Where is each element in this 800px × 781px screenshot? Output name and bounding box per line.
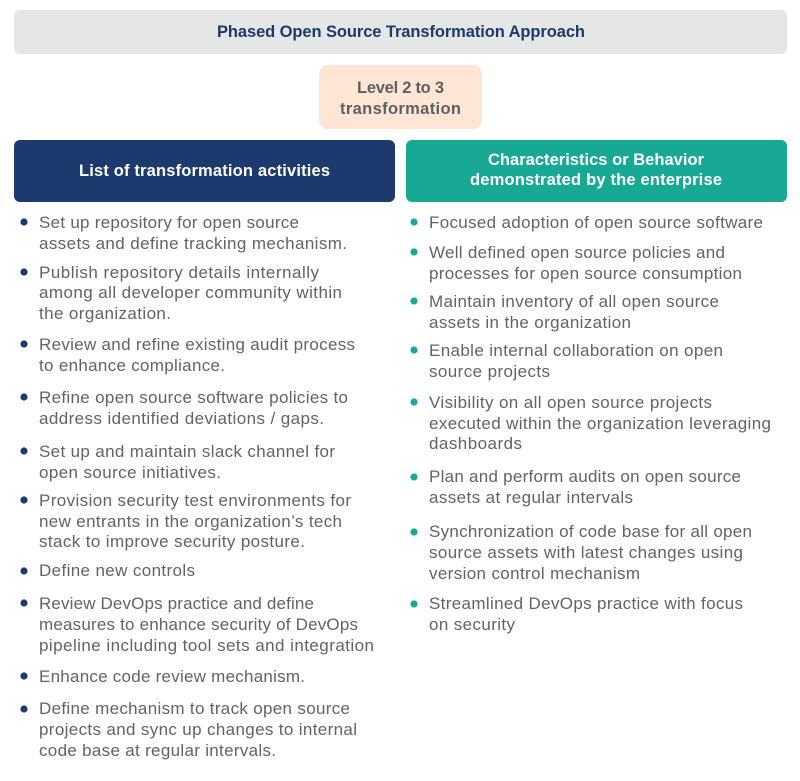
activity item 2: among all developer community within (39, 283, 342, 302)
panel heading: characteristics or behavior: Characteristics or Behavior (488, 151, 705, 169)
characteristic item 8: on security (429, 615, 516, 634)
activity item 7: Define new controls (39, 561, 195, 580)
activity item 1: assets and define tracking mechanism. (39, 234, 347, 253)
characteristic item 3: assets in the organization (429, 313, 631, 332)
activity item 5: Set up and maintain slack channel for (39, 442, 335, 461)
activity item 1: Set up repository for open source (39, 213, 299, 232)
characteristic item 7: source assets with latest changes using (429, 543, 743, 562)
activity item 10: code base at regular intervals. (39, 741, 276, 760)
characteristic item 2: processes for open source consumption (429, 264, 742, 283)
list: enterprise characteristics (410, 213, 771, 634)
activity item 2: Publish repository details internally (39, 263, 320, 282)
activity item 6: stack to improve security posture. (39, 532, 305, 551)
characteristic item 6: assets at regular intervals (429, 488, 633, 507)
characteristic item 5: dashboards (429, 434, 522, 453)
activity item 10 (20, 699, 357, 760)
activity item 5: open source initiatives. (39, 463, 221, 482)
activity item 4 (20, 388, 348, 428)
panel heading: characteristics or behavior: demonstrated by the enterprise (470, 171, 722, 189)
characteristic item 7: version control mechanism (429, 564, 640, 583)
activity item 4: Refine open source software policies to (39, 388, 348, 407)
level badge: transformation (340, 100, 461, 118)
characteristic item 4: source projects (429, 362, 550, 381)
characteristic item 5 (410, 393, 771, 453)
activity item 10: Define mechanism to track open source (39, 699, 350, 718)
activity item 8 (20, 594, 374, 655)
title banner (14, 10, 787, 54)
list: transformation activities (20, 213, 374, 760)
characteristic item 1: Focused adoption of open source software (429, 213, 763, 232)
panel heading: list of transformation activities: List of transformation activities (79, 162, 330, 180)
characteristic item 7: Synchronization of code base for all open (429, 522, 752, 541)
activity item 3: to enhance compliance. (39, 356, 225, 375)
activity item 5 (20, 442, 335, 482)
activity item 6 (20, 491, 351, 551)
characteristic item 4 (410, 341, 723, 381)
activity item 6: new entrants in the organization’s tech (39, 512, 342, 531)
panel heading: characteristics or behavior (406, 140, 787, 202)
activity item 10: projects and sync up changes to internal (39, 720, 357, 739)
characteristic item 2: Well defined open source policies and (429, 243, 725, 262)
characteristic item 3 (410, 292, 719, 332)
activity item 3: Review and refine existing audit process (39, 335, 355, 354)
activity item 2: the organization. (39, 304, 171, 323)
activity item 2 (20, 263, 342, 323)
activity item 9: Enhance code review mechanism. (39, 667, 305, 686)
level badge (319, 65, 482, 129)
characteristic item 5: Visibility on all open source projects (429, 393, 712, 412)
title banner: Phased Open Source Transformation Approach (217, 23, 585, 41)
characteristic item 8 (410, 594, 743, 634)
level badge: Level 2 to 3 (357, 79, 444, 97)
activity item 3 (20, 335, 355, 375)
activity item 8: pipeline including tool sets and integration (39, 636, 374, 655)
characteristic item 5: executed within the organization leveraging (429, 414, 771, 433)
characteristic item 3: Maintain inventory of all open source (429, 292, 719, 311)
activity item 6: Provision security test environments for (39, 491, 351, 510)
characteristic item 6 (410, 467, 741, 507)
activity item 8: measures to enhance security of DevOps (39, 615, 358, 634)
activity item 4: address identified deviations / gaps. (39, 409, 324, 428)
activity item 1 (20, 213, 347, 253)
characteristic item 2 (410, 243, 742, 283)
characteristic item 4: Enable internal collaboration on open (429, 341, 723, 360)
characteristic item 6: Plan and perform audits on open source (429, 467, 741, 486)
characteristic item 8: Streamlined DevOps practice with focus (429, 594, 743, 613)
characteristic item 7 (410, 522, 752, 583)
activity item 8: Review DevOps practice and define (39, 594, 314, 613)
panel heading: list of transformation activities (14, 140, 395, 202)
